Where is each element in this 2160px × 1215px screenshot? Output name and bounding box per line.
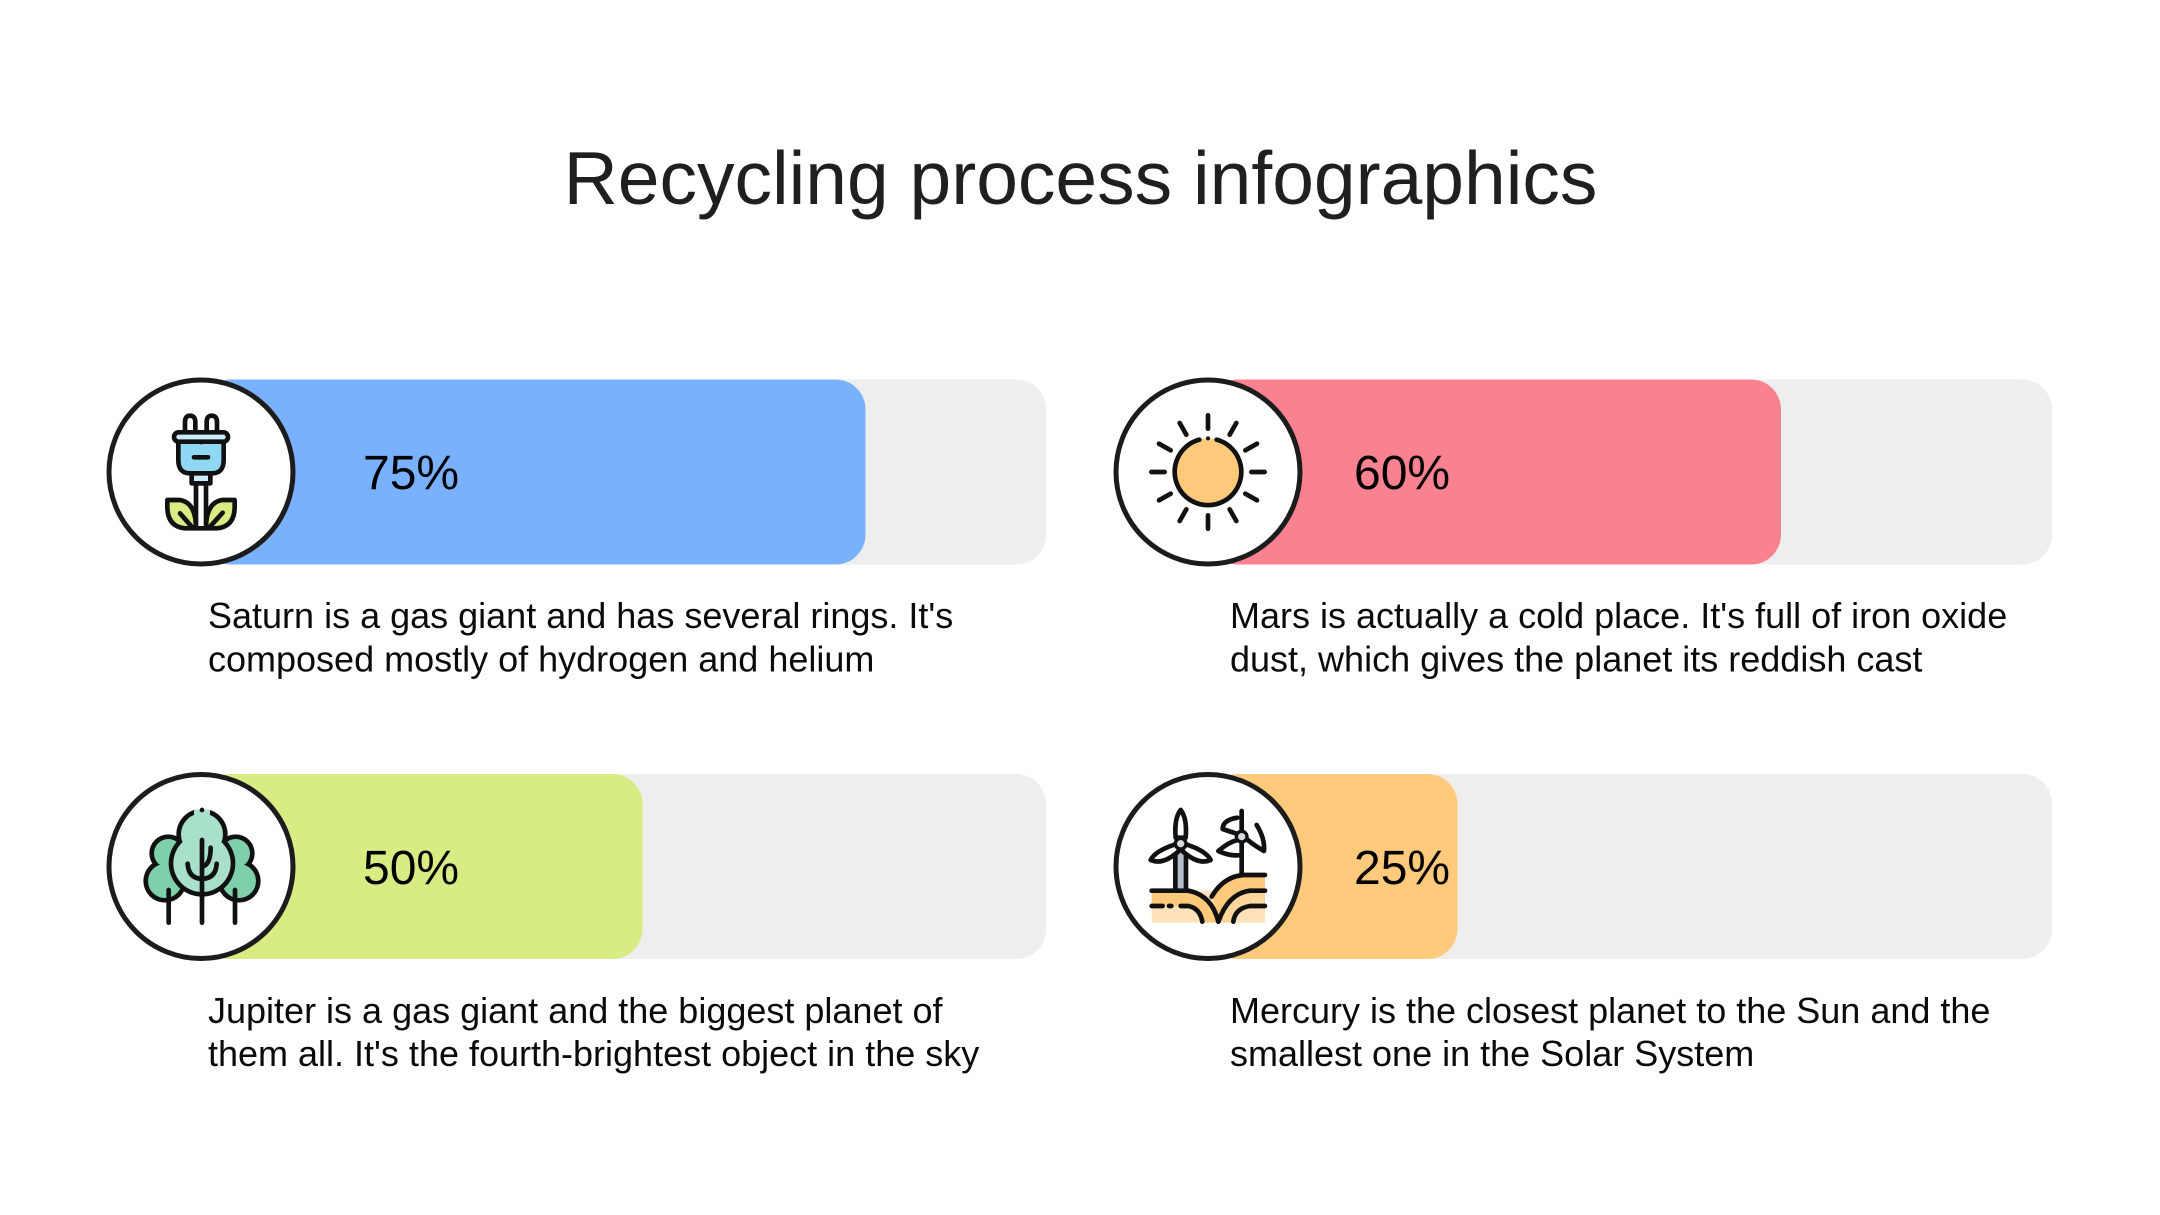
progress track [201,380,1046,564]
percentage: 50% [363,842,459,895]
icon circle [1116,380,1300,564]
progress fill 60% [1208,380,1781,564]
percentage: 60% [1354,447,1450,500]
progress fill 50% [201,774,642,959]
description [1230,595,2007,680]
panel: 60% Mars [1116,380,2052,680]
panel: 50% Jupiter [109,774,1046,1074]
icon circle [109,774,293,958]
icon: wind turbines [1151,810,1265,923]
panel: 25% Mercury [1116,774,2052,1074]
progress track [1208,380,2052,564]
progress track [201,774,1046,959]
percentage: 25% [1354,842,1450,895]
progress fill 75% [201,380,866,564]
panel: 75% Saturn [109,380,1046,680]
description: smallest one in the Solar System [1230,1033,1754,1074]
description: Jupiter is a gas giant and the biggest planet of [208,990,944,1031]
description [1230,990,1990,1074]
description: Mercury is the closest planet to the Sun and the [1230,990,1990,1031]
description: them all. It's the fourth-brightest object in the sky [208,1033,979,1074]
title: Recycling process infographics [564,136,1597,220]
description: composed mostly of hydrogen and helium [208,638,874,680]
description [208,990,979,1074]
icon: plug with leaves [167,416,235,528]
icon: trees [143,805,261,923]
description: Saturn is a gas giant and has several rings. It's [208,595,953,636]
icon circle [109,380,293,564]
icon: sun [1151,415,1265,529]
description: dust, which gives the planet its reddish cast [1230,638,1922,680]
description: Mars is actually a cold place. It's full of iron oxide [1230,595,2007,636]
progress fill 25% [1208,774,1458,959]
icon circle [1116,774,1300,958]
progress track [1208,774,2052,959]
percentage: 75% [363,447,459,500]
description [208,595,953,680]
